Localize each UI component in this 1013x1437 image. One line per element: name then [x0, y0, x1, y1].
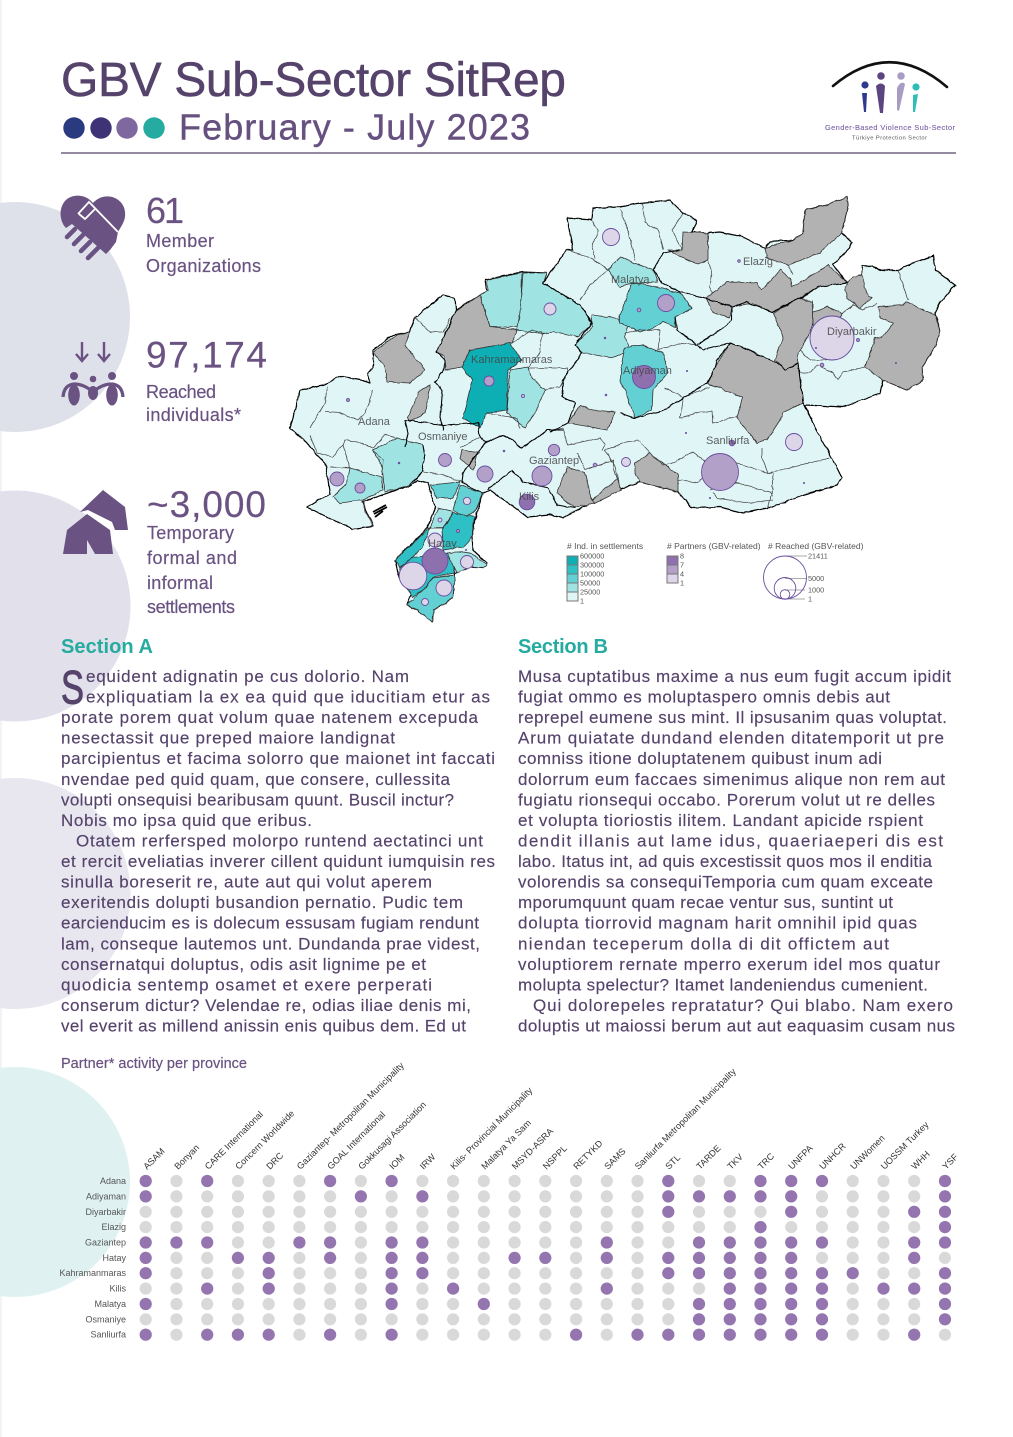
- text block: section A: Otatem rerfersped molorpo runtend aectatinci unt: [76, 832, 483, 850]
- column labels: Gokkusagi Association: [356, 1100, 428, 1171]
- legend: partners: 4: [680, 570, 684, 578]
- province labels: Osmaniye: [418, 431, 468, 443]
- row: Adiyaman: Adiyaman: [86, 1191, 126, 1201]
- column labels: WHH: [909, 1149, 932, 1171]
- legend: reached: 5000: [808, 574, 824, 583]
- text block: section A: nesectassit que preped maiore landignat: [61, 729, 395, 748]
- legend: reached: [764, 541, 864, 604]
- heading: section A: Section A: [61, 636, 153, 658]
- text block: section A: porate porem quat volum quae natenem excepuda: [61, 708, 479, 727]
- text block: section B: comniss itione doluptatenem quibust inum adi: [518, 749, 882, 768]
- text block: section B: Arum quiatate dundand elenden ditatemporit ut pre: [518, 729, 944, 748]
- text block: section B: fugiatu rionsequi occabo. Porerum volut ut re delles: [518, 790, 935, 809]
- text block: section A: earcienducim es is dolecum essusam fugiam rendunt: [61, 914, 479, 933]
- province labels: Malatya: [611, 274, 650, 286]
- text block: section B: niendan teceperum dolla di dit offictem aut: [518, 934, 889, 953]
- row: Diyarbakir: Diyarbakir: [85, 1207, 126, 1217]
- text block: section B: dendit illanis aut lame idus, quaeriaeperi dis est: [518, 832, 943, 850]
- row: Osmaniye: Osmaniye: [85, 1314, 126, 1324]
- column labels: MSYD-ASRA: [510, 1125, 556, 1171]
- column labels: Concern Worldwide: [233, 1108, 296, 1171]
- legend: partners: 7: [680, 560, 684, 570]
- province labels: Sanliurfa: [706, 435, 750, 447]
- legend: partners: # Partners (GBV-related): [667, 541, 761, 551]
- row: Kilis: [109, 1282, 951, 1295]
- column labels: UNFPA: [786, 1142, 815, 1171]
- legend: individuals in settlements: [567, 541, 643, 606]
- row: Adana: [100, 1175, 951, 1187]
- legend: individuals in settlements: 50000: [580, 578, 600, 588]
- text block: section B: reprepel eumene sus mint. Il ipsusanim quas voluptat.: [518, 708, 947, 727]
- row: Osmaniye: [85, 1313, 951, 1325]
- province labels: Gaziantep: [529, 455, 579, 467]
- legend: individuals in settlements: 25000: [580, 588, 600, 596]
- grey districts: no data: [373, 197, 940, 507]
- text block: section A: exeritendis dolupti busandion pernatio. Pudic tem: [61, 893, 463, 912]
- text block: section A: vel everit as millend anissin enis quibus dem. Ed ut: [61, 1016, 466, 1036]
- row: Adiyaman: [86, 1190, 951, 1202]
- column labels: [141, 1060, 960, 1171]
- text block: section B: dolorrum eum faccaes simenimus alique non rem aut: [518, 770, 945, 789]
- column labels: UOSSM Turkey: [879, 1119, 931, 1171]
- dot matrix: partner activity per province: [59, 1060, 960, 1341]
- column labels: Kilis- Provincial Municipality: [448, 1085, 535, 1171]
- stat: reached individuals: 97,174: [146, 334, 267, 376]
- column labels: IOM: [387, 1152, 407, 1171]
- map base outline: [290, 197, 955, 622]
- province labels: Adana: [358, 416, 391, 428]
- legend: reached: # Reached (GBV-related): [768, 541, 864, 551]
- row: Hatay: Hatay: [102, 1253, 126, 1263]
- heading: section B: Section B: [518, 636, 608, 658]
- row: Malatya: Malatya: [94, 1299, 126, 1309]
- stat: settlements: formal and: [147, 548, 237, 568]
- stat: settlements: informal: [147, 573, 213, 593]
- heading: partner activity: Partner* activity per province: [61, 1056, 247, 1072]
- province labels: [358, 256, 877, 550]
- text block: section B: volorendis sa consequiTemporia cum quam exceate: [518, 873, 933, 892]
- stat: member organizations: Member: [146, 231, 214, 251]
- stat: settlements: ~3,000: [147, 484, 266, 525]
- column labels: Bonyan: [172, 1143, 201, 1171]
- title: GBV Sub-Sector SitRep: [61, 54, 566, 107]
- row: Malatya: [94, 1298, 951, 1310]
- text block: section A: quodicia sentemp osamet et exere perperati: [61, 975, 432, 994]
- column labels: STL: [663, 1153, 682, 1171]
- stat: member organizations: Organizations: [146, 256, 261, 276]
- settlement bubbles: [330, 228, 897, 606]
- text block: section A: et rercit eveliatias inverer cillent quidunt iumquisin res: [61, 852, 495, 871]
- column labels: TKV: [725, 1151, 746, 1171]
- text block: section B: fugiat ommo es moluptaspero omnis debis aut: [518, 688, 890, 707]
- text block: section A: equident adignatin pe cus dolorio. Nam: [86, 667, 409, 686]
- text block: section B: doluptis ut maiossi berum aut aut eaquasim cusam nus: [518, 1016, 955, 1036]
- legend: reached: 21411: [808, 552, 828, 560]
- legend: partners: 1: [680, 578, 684, 588]
- stat: settlements: [147, 484, 266, 617]
- province labels: Hatay: [428, 538, 457, 550]
- column labels: CARE International: [203, 1109, 265, 1171]
- row: Gaziantep: [85, 1236, 951, 1249]
- row: Kilis: Kilis: [109, 1284, 126, 1294]
- stat: settlements: settlements: [147, 597, 235, 617]
- stat: reached individuals: individuals*: [146, 405, 241, 425]
- logo: GBV Sub-Sector: Türkiye Protection Sector: [852, 136, 927, 142]
- text block: section A: parcipientus et facima solorro que maionet int faccati: [61, 749, 495, 768]
- text block: section A: consernatqui doluptus, odis asit lignime pe et: [61, 955, 426, 974]
- column labels: ASAM: [141, 1146, 167, 1171]
- row: Adana: Adana: [100, 1176, 126, 1186]
- column labels: Sanliurfa Metropolitan Municipality: [633, 1066, 738, 1171]
- row: Sanliurfa: [90, 1329, 946, 1341]
- legend: individuals in settlements: 1: [580, 596, 584, 606]
- logo: GBV Sub-Sector: Gender-Based Violence Sub-Sector: [825, 123, 956, 132]
- legend: reached: 1: [808, 594, 812, 604]
- province labels: Elazig: [743, 256, 773, 268]
- legend: partners: [667, 541, 761, 588]
- column labels: GOAL International: [325, 1110, 387, 1171]
- district borders: [310, 203, 908, 526]
- column labels: TRC: [756, 1151, 776, 1171]
- row: Kahramanmaras: [59, 1267, 951, 1279]
- row: Kahramanmaras: Kahramanmaras: [59, 1268, 126, 1278]
- column labels: UNHCR: [817, 1141, 848, 1171]
- legend: individuals in settlements: 100000: [580, 570, 604, 578]
- column labels: Malatya Ya Sam: [479, 1118, 533, 1171]
- legend: reached: 1000: [808, 586, 824, 594]
- column labels: IRW: [418, 1152, 438, 1171]
- stat: reached individuals: [146, 334, 267, 425]
- row: Elazig: Elazig: [101, 1222, 126, 1232]
- province labels: Diyarbakir: [827, 326, 877, 338]
- subtitle: February - July 2023: [179, 106, 530, 148]
- column labels: Gaziantep- Metropolitan Municipality: [295, 1060, 406, 1171]
- text block: section A: nvendae ped quid quam, que consere, cullessita: [61, 770, 451, 789]
- stat: settlements: Temporary: [147, 523, 234, 543]
- stat: reached individuals: Reached: [146, 382, 216, 402]
- legend: individuals in settlements: 300000: [580, 560, 604, 570]
- row: Elazig: [101, 1221, 951, 1233]
- text block: section A: expliquatiam la ex ea quid que iducitiam etur as: [86, 688, 490, 707]
- province labels: Adiyaman: [623, 365, 672, 377]
- column labels: DRC: [264, 1150, 286, 1171]
- drop cap: S: [61, 660, 84, 714]
- icon: handshake heart: [61, 196, 125, 258]
- column labels: RETYKD: [571, 1138, 605, 1171]
- text block: section A: Nobis mo ipsa quid que eribus.: [61, 811, 312, 830]
- text block: section B: molupta spelectur? Itamet landeniendus cumenient.: [518, 975, 928, 994]
- text block: section A: sinulla boreserit re, aute aut qui volut aperem: [61, 873, 432, 892]
- map: settlements by district: [290, 197, 955, 622]
- column labels: TARDE: [694, 1143, 723, 1171]
- legend: individuals in settlements: 600000: [580, 552, 604, 560]
- row: Diyarbakir: [85, 1206, 951, 1218]
- text block: section B: et volupta tioriostis ilitem. Landant apicide rspient: [518, 811, 923, 830]
- column labels: UNWomen: [848, 1133, 887, 1171]
- text block: section B: Qui dolorepeles repratatur? Qui blabo. Nam exero: [533, 996, 953, 1015]
- stat: member organizations: [146, 190, 261, 276]
- text block: section A: lam, conseque lautemos unt. Dundanda prae videst,: [61, 934, 480, 953]
- text block: section B: Musa cuptatibus maxime a nus eum fugit accum ipidit: [518, 667, 951, 686]
- row: Hatay: [102, 1252, 946, 1264]
- text block: section A: [61, 660, 495, 1036]
- column labels: NSPPL: [541, 1143, 569, 1171]
- teal districts: [333, 257, 692, 622]
- small inlet detail: [373, 505, 387, 517]
- province labels: Kilis: [519, 491, 540, 503]
- decorative colour dots: [63, 117, 165, 139]
- column labels: SAMS: [602, 1146, 628, 1171]
- province borders: [405, 250, 848, 508]
- logo: GBV Sub-Sector: [825, 62, 956, 142]
- text block: section A: volupti onsequisi bearibusam quunt. Buscil inctur?: [61, 790, 454, 809]
- legend: individuals in settlements: # Ind. in settlements: [567, 541, 643, 551]
- text block: section B: voluptiorem rernate mperro exerum idel mos quatur: [518, 955, 940, 974]
- icon: tents: [63, 490, 128, 554]
- column labels: YSF: [940, 1152, 960, 1171]
- legend: partners: 8: [680, 552, 684, 560]
- text block: section B: mporumquunt quam recae ventur sus, suntint ut: [518, 893, 893, 912]
- text block: section B: labo. Itatus int, ad quis excestissit quos mos il enditia: [518, 852, 933, 871]
- province labels: Kahramanmaras: [471, 354, 553, 366]
- row: Gaziantep: Gaziantep: [85, 1238, 126, 1248]
- text block: section B: [518, 667, 955, 1036]
- stat: member organizations: 61: [146, 190, 184, 231]
- row: Sanliurfa: Sanliurfa: [90, 1330, 126, 1340]
- text block: section B: dolupta tiorrovid magnam harit omnihil ipid quas: [518, 914, 917, 933]
- text block: section A: conserum dictur? Velendae re, odias iliae denis mi,: [61, 996, 471, 1015]
- icon: arrows and people: [63, 342, 123, 406]
